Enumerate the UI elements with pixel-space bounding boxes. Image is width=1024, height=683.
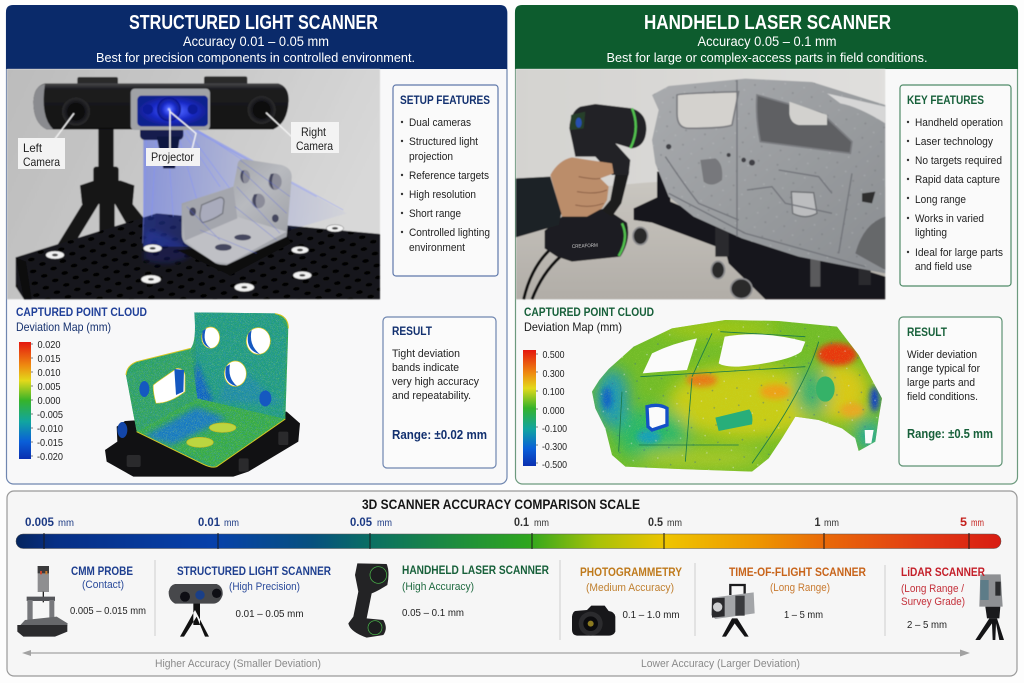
result description: and repeatability. [392,390,471,402]
arm and hand [516,157,614,237]
scale tick labels: mm [224,518,239,529]
subheading: deviation map: Deviation Map (mm) [16,320,111,334]
name: STRUCTURED LIGHT SCANNER [177,564,331,578]
range: 0.01 – 0.05 mm [236,608,304,620]
feature list: Structured light [409,136,478,148]
subheading: deviation map: Deviation Map (mm) [524,320,622,334]
feature list: Controlled lighting [409,227,490,239]
panel: handheld laser scanner [515,5,1018,484]
feature list: High resolution [409,189,476,201]
scale tick labels: 0.005 [25,517,55,529]
colour legend: 0.000 [542,405,565,417]
type: (Long Range) [770,582,830,594]
feature list: projection [409,151,453,163]
scale tick labels: mm [971,518,984,529]
item: LiDAR scanner [901,565,1004,640]
item: photogrammetry [572,565,682,636]
callout: right camera [291,122,339,153]
colour legend: -0.015 [37,437,63,449]
result description: field conditions. [907,391,978,403]
callout leader lines [52,110,292,150]
type: (Medium Accuracy) [586,582,674,594]
feature list [401,117,490,254]
feature list: Laser technology [915,136,993,148]
name: CMM PROBE [71,564,133,578]
target markers [46,225,344,292]
colour legend: 0.300 [542,368,565,380]
callout: left camera [18,138,65,169]
colour legend: -0.100 [542,423,567,435]
range: 1 – 5 mm [784,609,823,621]
type: Survey Grade) [901,596,965,608]
title: STRUCTURED LIGHT SCANNER [129,12,378,34]
icon: DSLR camera [572,606,615,636]
3D scanner head [33,76,289,168]
result description [392,348,479,402]
type: (High Accuracy) [402,581,474,593]
type: (Contact) [82,579,124,591]
result description [907,349,980,403]
colour legend: 0.020 [38,339,61,351]
result description: bands indicate [392,362,459,374]
item: CMM probe [17,564,146,637]
car window openings [643,334,874,443]
scale tick labels [25,517,984,529]
scale title: 3D SCANNER ACCURACY COMPARISON SCALE [362,496,640,512]
name: TIME-OF-FLIGHT SCANNER [729,565,866,579]
colour legend: 0.000 [38,395,61,407]
point cloud: car body side [589,318,885,475]
scale tick labels: mm [824,518,839,529]
scale tick labels: 0.5 [648,517,664,529]
heading: setup features: SETUP FEATURES [400,93,490,107]
colour legend: -0.300 [542,441,567,453]
name: PHOTOGRAMMETRY [580,565,682,579]
item: time-of-flight scanner [711,565,866,637]
callout: left camera: Left [23,141,43,155]
light beams [143,129,347,247]
colour legend [19,339,63,463]
result range: Range: ±0.02 mm [392,427,487,442]
name: LiDAR SCANNER [901,565,985,579]
panel: structured light scanner [6,5,507,484]
feature list: and field use [915,261,972,273]
feature list: lighting [915,227,947,239]
name: HANDHELD LASER SCANNER [402,563,549,577]
heading: captured point cloud: CAPTURED POINT CLOUD [16,305,147,319]
feature list: environment [409,242,465,254]
feature list: Dual cameras [409,117,471,129]
table [16,213,380,299]
type: (Long Range / [901,583,965,595]
feature list: Handheld operation [915,117,1003,129]
scale tick labels: 1 [814,517,821,529]
scale tick labels: 0.1 [514,517,530,529]
callout: left camera: Camera [23,155,60,169]
colour legend: -0.010 [37,423,63,435]
photo: structured light scanner setup [7,69,380,299]
item: structured light scanner [169,564,331,637]
icon: LiDAR scanner on tripod [975,574,1004,640]
callout: right camera: Camera [296,139,333,153]
scale tick labels: 0.05 [350,517,373,529]
car body shell [652,79,885,273]
point cloud: angle bracket [105,308,300,477]
photo: handheld scanner and car body [516,69,885,299]
colour legend: 0.005 [38,381,61,393]
result description: Tight deviation [392,348,460,360]
scale tick labels: 5 [960,517,968,529]
icon: structured light scanner on tripod [169,584,223,637]
box: result, handheld laser [899,317,1002,466]
feature list: Short range [409,208,461,220]
result description: range typical for [907,363,980,375]
gradient scale bar [16,533,1001,549]
cart [634,172,885,299]
range: 2 – 5 mm [907,619,947,631]
scanner brand lettering: CREAFORM [572,243,598,250]
angle bracket part [177,159,292,275]
scale tick labels: mm [667,518,682,529]
colour legend: 0.100 [542,386,565,398]
box: key features [900,85,1011,286]
scale tick labels: mm [534,518,549,529]
best-for line: Best for large or complex-access parts in field conditions. [606,50,928,65]
colour legend: -0.020 [37,451,63,463]
box: result, structured light [383,317,496,468]
best-for line: Best for precision components in controlled environment. [96,50,415,65]
panel: accuracy comparison scale [7,491,1017,676]
result description: large parts and [907,377,975,389]
result range: Range: ±0.5 mm [907,426,993,441]
scale tick labels: mm [377,518,392,529]
header: handheld laser scanner [515,5,1018,69]
callout: projector: Projector [151,150,194,164]
tripod [57,128,144,247]
feature list: Ideal for large parts [915,247,1003,259]
label: lower accuracy: Lower Accuracy (Larger Deviation) [641,658,800,670]
result heading: RESULT [392,324,433,338]
feature list: No targets required [915,155,1002,167]
icon: time-of-flight scanner on tripod [711,585,755,637]
colour legend: 0.500 [542,349,565,361]
result description: Wider deviation [907,349,977,361]
label: higher accuracy: Higher Accuracy (Smaller Deviation) [155,658,321,670]
heading: captured point cloud: CAPTURED POINT CLOUD [524,305,654,319]
icon: handheld laser scanner [348,563,389,638]
box: setup features [393,85,498,276]
callout: right camera: Right [301,125,327,139]
colour legend: 0.010 [38,367,61,379]
icon: CMM machine [17,566,68,637]
title: HANDHELD LASER SCANNER [644,12,891,34]
feature list: Works in varied [915,213,984,225]
range: 0.05 – 0.1 mm [402,607,464,619]
scale tick labels: mm [58,518,74,529]
scale tick labels: 0.01 [198,517,221,529]
colour legend: 0.015 [38,353,61,365]
type [901,583,965,608]
heading: key features: KEY FEATURES [907,93,984,107]
range: 0.1 – 1.0 mm [622,609,680,621]
colour legend [523,349,567,471]
feature list: Long range [915,194,966,206]
result heading: RESULT [907,325,948,339]
result description: very high accuracy [392,376,479,388]
callout: projector [146,148,200,166]
range: 0.005 – 0.015 mm [70,605,146,617]
header: structured light scanner [6,5,507,69]
feature list [907,117,1003,273]
accuracy line: Accuracy 0.01 – 0.05 mm [183,34,329,49]
handheld laser scanner [524,104,646,299]
colour legend: -0.500 [542,459,567,471]
arrow: accuracy direction [22,650,970,656]
cart wheels [633,227,752,299]
type: (High Precision) [229,581,300,593]
feature list: Rapid data capture [915,174,1000,186]
colour legend: -0.005 [37,409,63,421]
feature list: Reference targets [409,170,489,182]
item: handheld laser scanner [348,563,549,638]
accuracy line: Accuracy 0.05 – 0.1 mm [698,34,836,49]
